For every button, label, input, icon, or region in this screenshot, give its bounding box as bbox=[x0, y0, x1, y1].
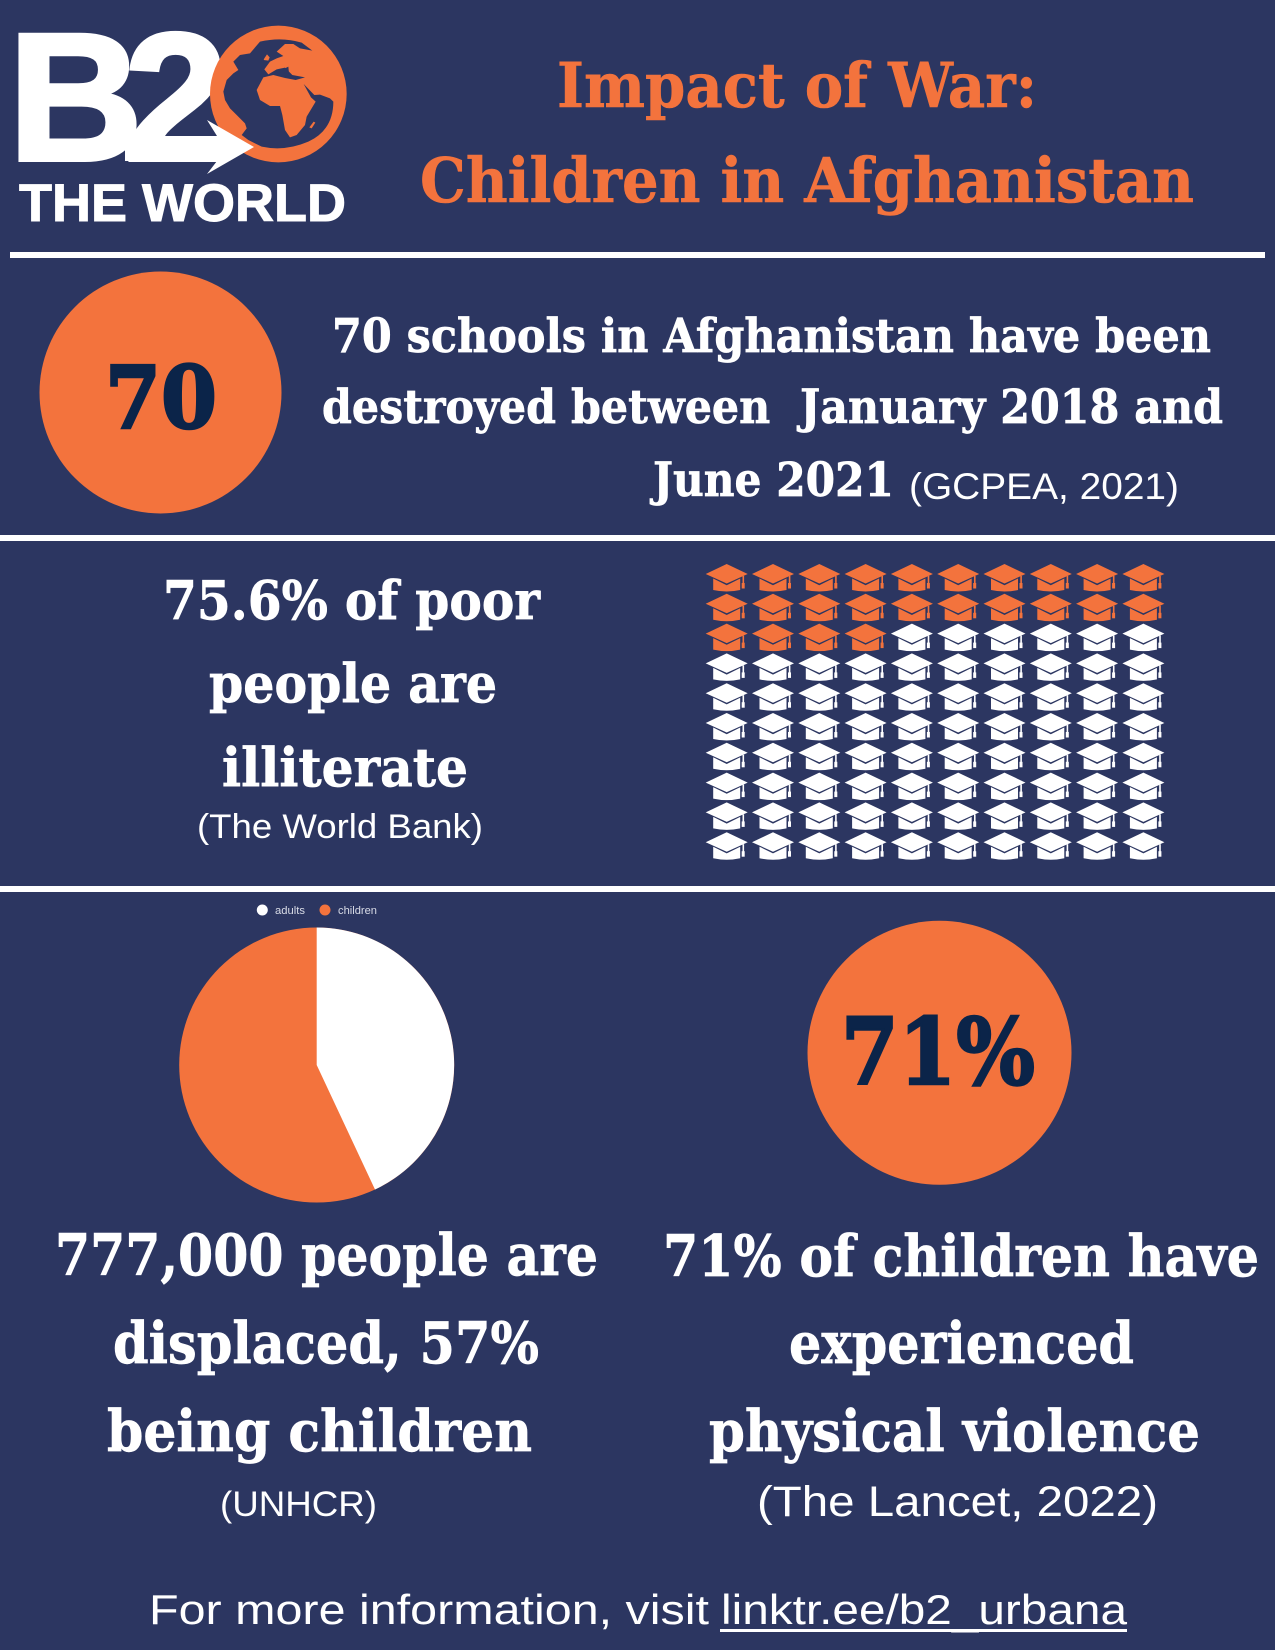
chart legend bbox=[257, 904, 377, 917]
title: Children in Afghanistan bbox=[420, 144, 1194, 217]
stat circle: 70: 70 bbox=[105, 348, 217, 449]
text: displacement: being children bbox=[107, 1398, 532, 1465]
text: illiteracy: people are bbox=[209, 653, 497, 715]
text: displacement: displaced, 57% bbox=[113, 1310, 539, 1377]
text: illiteracy bbox=[163, 570, 541, 846]
text: displacement bbox=[55, 1222, 598, 1524]
footer link text bbox=[149, 1586, 1128, 1633]
text: violence: physical violence bbox=[709, 1398, 1200, 1465]
chart legend: children bbox=[338, 905, 377, 917]
text: illiteracy: 75.6% of poor bbox=[163, 570, 541, 632]
text: schools destroyed: June 2021 bbox=[649, 453, 894, 508]
text: displacement: (UNHCR) bbox=[220, 1485, 377, 1524]
logo: B2 the World: B bbox=[8, 0, 143, 199]
text: violence bbox=[663, 1223, 1259, 1526]
text: schools destroyed: (GCPEA, 2021) bbox=[909, 466, 1179, 507]
text: schools destroyed bbox=[322, 309, 1223, 508]
chart legend: adults bbox=[275, 905, 306, 917]
text: illiteracy: illiterate bbox=[222, 737, 468, 799]
stat circle: 71%: 71% bbox=[841, 998, 1035, 1106]
text: violence: experienced bbox=[789, 1310, 1134, 1377]
footer link text: For more information, visit bbox=[149, 1586, 709, 1633]
text: schools destroyed: 70 schools in Afghanistan have been bbox=[332, 309, 1211, 364]
title: Impact of War: bbox=[557, 49, 1037, 122]
title bbox=[420, 49, 1194, 217]
text: violence: (The Lancet, 2022) bbox=[757, 1478, 1158, 1526]
text: illiteracy: (The World Bank) bbox=[197, 808, 483, 846]
logo: B2 the World bbox=[8, 0, 347, 233]
pie chart: adults vs children bbox=[179, 928, 454, 1202]
chart: graduation cap pictogram, 24 of 100 orange bbox=[706, 564, 1164, 860]
arrow bbox=[125, 120, 254, 174]
logo: B2 the World: 2 bbox=[124, 0, 228, 199]
stat circle: 70 bbox=[40, 272, 282, 514]
stat circle: 71% bbox=[808, 921, 1072, 1185]
logo: B2 the World: THE WORLD bbox=[19, 174, 346, 233]
footer link text: linktr.ee/b2_urbana bbox=[721, 1586, 1128, 1633]
text: displacement: 777,000 people are bbox=[55, 1222, 598, 1289]
icon: globe bbox=[210, 26, 347, 162]
